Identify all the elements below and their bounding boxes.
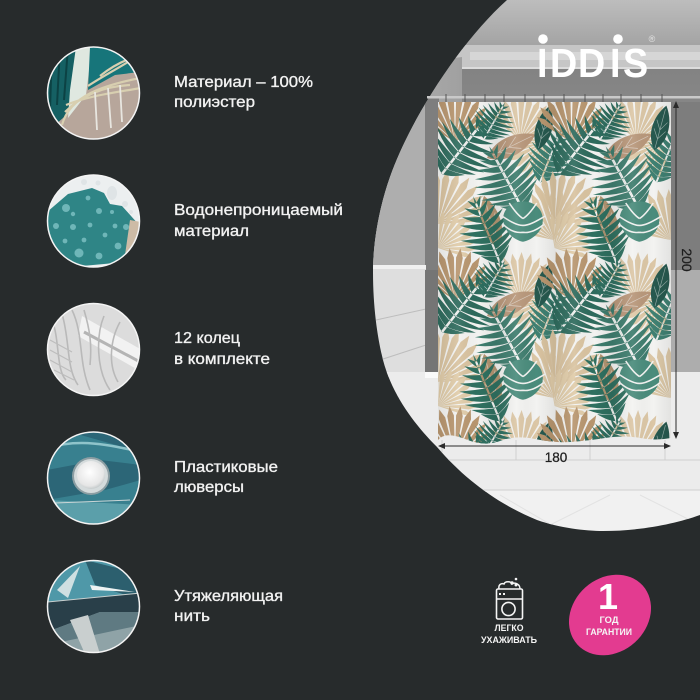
text: material: Материал – 100% <box>174 74 313 91</box>
curtain rod <box>427 96 700 98</box>
text: material <box>174 74 313 111</box>
warranty badge <box>553 558 667 672</box>
text: weighted thread: нить <box>174 608 210 625</box>
icon: washing machine <box>496 578 522 619</box>
feature 3: rings <box>47 303 270 397</box>
text: waterproof: Водонепроницаемый <box>174 202 343 219</box>
thumbnail: grommet <box>47 432 141 526</box>
text: grommets: Пластиковые <box>174 459 278 476</box>
pink blob <box>553 558 667 672</box>
warranty text <box>586 615 632 637</box>
curtain rings <box>446 94 662 104</box>
text: grommets: люверсы <box>174 479 244 496</box>
warranty number: 1 <box>598 576 618 617</box>
thumbnail: water drops <box>47 174 141 268</box>
thumbnail: rings on rod <box>47 303 142 397</box>
feature 4: grommets <box>47 432 278 526</box>
feature 5: weighted thread <box>47 560 283 654</box>
text: material: полиэстер <box>174 94 255 111</box>
text: waterproof <box>174 202 343 240</box>
text: grommets <box>174 459 278 496</box>
text: easy care: ЛЕГКО <box>494 623 524 633</box>
thumbnail: fabric close-up <box>47 47 141 141</box>
text: weighted thread: Утяжеляющая <box>174 588 283 605</box>
text: weighted thread <box>174 588 283 625</box>
feature 1: material <box>47 47 313 141</box>
thumbnail: hem thread <box>47 560 141 654</box>
text: waterproof: материал <box>174 223 249 240</box>
logo IDDIS: ® <box>649 34 656 44</box>
dimension: width 180 <box>438 443 671 465</box>
text: rings <box>174 330 270 368</box>
dimension: height 200: 200 <box>679 248 695 272</box>
text: easy care <box>481 623 538 645</box>
easy care badge <box>481 578 538 645</box>
feature 2: waterproof <box>47 174 343 268</box>
curtain pattern <box>438 102 671 444</box>
logo IDDIS: IDDIS <box>537 41 648 86</box>
shower curtain <box>427 94 700 444</box>
dimension: height 200 <box>673 101 695 439</box>
text: easy care: УХАЖИВАТЬ <box>481 635 538 645</box>
bathroom photo panel <box>370 0 700 535</box>
warranty text: ГАРАНТИИ <box>586 627 632 637</box>
text: rings: 12 колец <box>174 330 240 347</box>
warranty text: ГОД <box>600 615 619 625</box>
text: rings: в комплекте <box>174 351 270 368</box>
dimension: width 180: 180 <box>545 450 567 465</box>
